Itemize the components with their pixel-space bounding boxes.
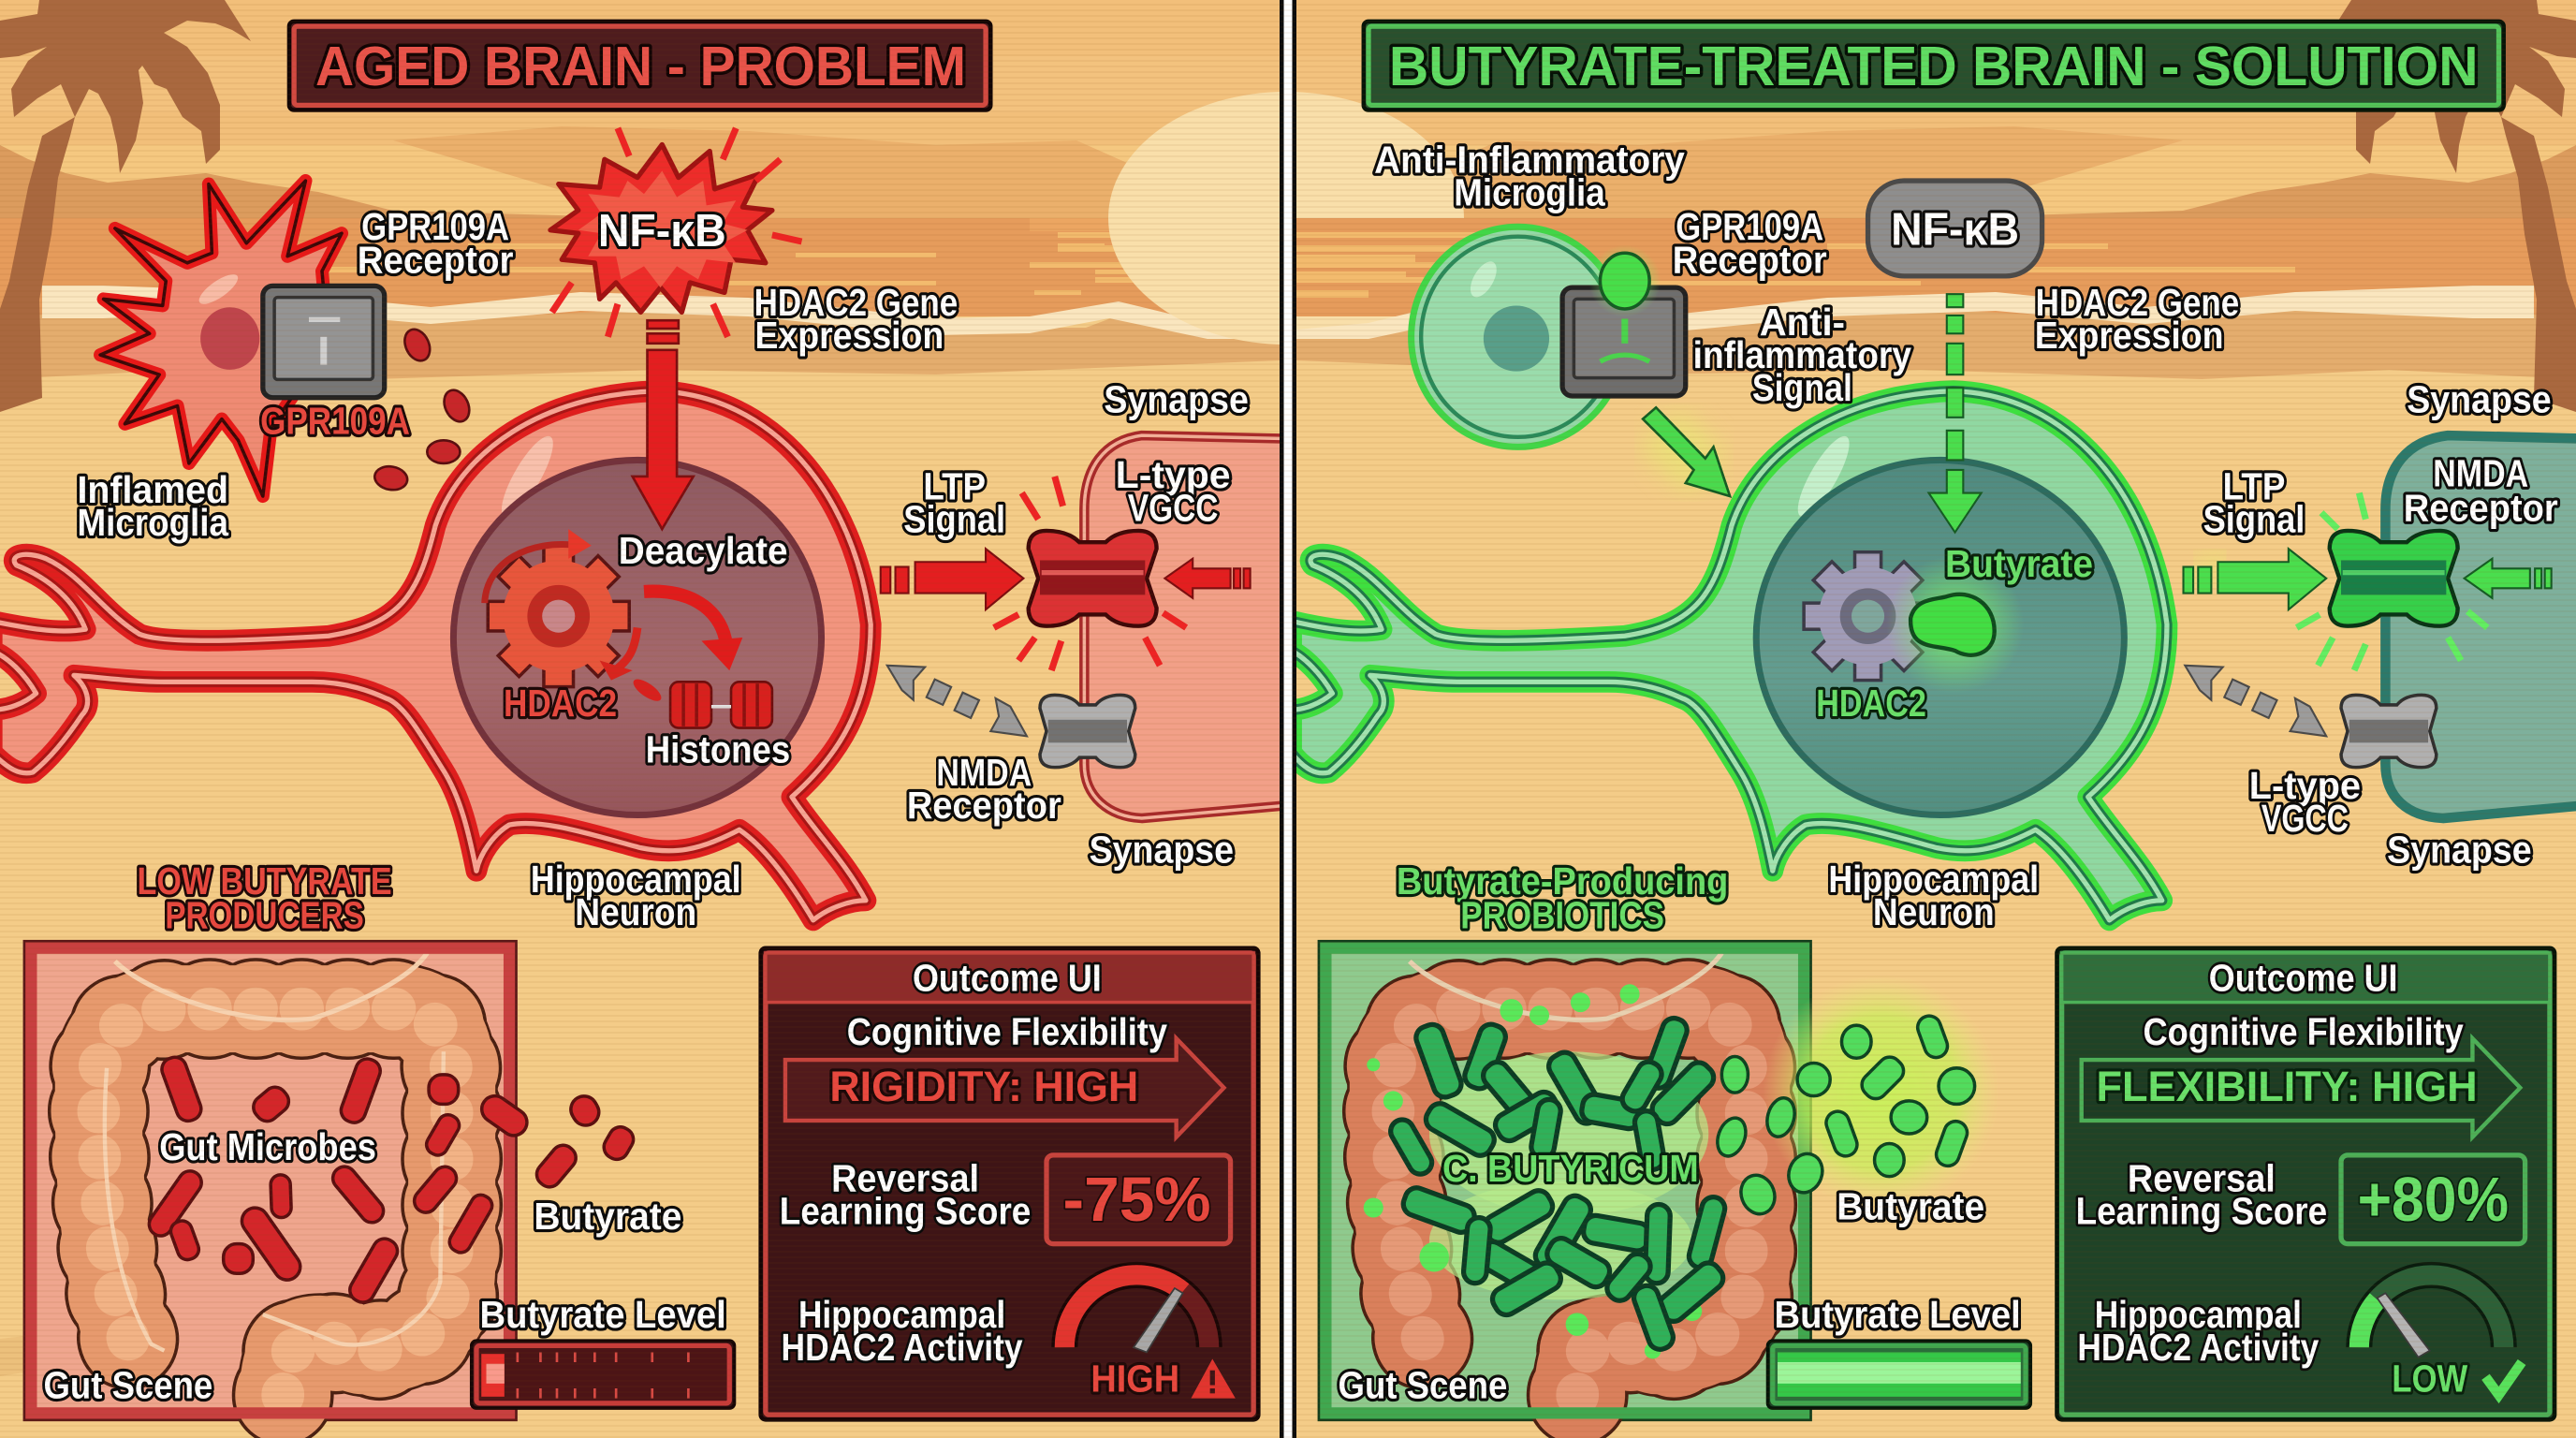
label: Anti-inflammatory Signal: inflammatory	[1693, 333, 1912, 376]
label: HIGH: HIGH	[1090, 1357, 1179, 1401]
panel: aged brain problem	[0, 22, 1290, 1419]
label: Low Butyrate Producers	[138, 859, 392, 937]
stat: -75%	[1046, 1155, 1231, 1244]
green probiotic glows	[1364, 984, 1714, 1358]
label: L-type VGCC	[1116, 453, 1231, 529]
label: L-type VGCC	[2249, 764, 2361, 840]
label: NMDA Receptor: Receptor	[2404, 486, 2558, 529]
panel: butyrate-treated brain solution	[1292, 22, 2576, 1419]
label: LTP Signal	[2203, 465, 2305, 541]
label: Hippocampal Neuron: Neuron	[575, 890, 696, 933]
label: Butyrate green: Butyrate	[1945, 542, 2093, 585]
title: butyrate-treated brain	[1364, 22, 2504, 110]
label: Butyrate: Butyrate	[1837, 1184, 1984, 1227]
label: LTP Signal: LTP	[2223, 465, 2285, 508]
arrow: signal to neuron	[1643, 407, 1730, 496]
label: LTP Signal	[903, 465, 1005, 541]
label: Gut Scene: Gut Scene	[1339, 1364, 1507, 1407]
label: Reversal Learning Score	[2076, 1156, 2327, 1233]
label: LTP Signal: LTP	[923, 465, 986, 508]
label: L-type VGCC: L-type	[2249, 764, 2361, 807]
label: LOW: LOW	[2392, 1357, 2468, 1401]
label: Synapse bottom: Synapse	[2387, 828, 2532, 871]
icon: butyrate blob	[1886, 555, 2024, 694]
label: Hippocampal Neuron	[1828, 858, 2039, 933]
title: aged brain	[289, 22, 990, 110]
label: L-type VGCC: L-type	[1116, 453, 1231, 496]
icon: NF-kB inactive pill: NF-κB	[1891, 205, 2019, 256]
nucleus	[453, 460, 822, 815]
label: Anti-inflammatory Signal	[1693, 301, 1912, 409]
label: NMDA Receptor	[907, 751, 1061, 827]
panel: outcome UI	[761, 948, 1258, 1419]
label: NMDA Receptor: NMDA	[936, 751, 1032, 794]
icon: GPR109A receptor activated	[1562, 245, 1686, 396]
title: butyrate-treated brain: BUTYRATE-TREATED BRAIN - SOLUTION	[1389, 35, 2479, 97]
arrow status: flexibility high: FLEXIBILITY: HIGH	[2097, 1063, 2478, 1110]
icon: inflamed microglia	[100, 181, 342, 496]
label: Histones: Histones	[646, 727, 790, 770]
label: Anti-Inflammatory Microglia: Microglia	[1454, 170, 1605, 213]
icon: HDAC2 gear active	[485, 529, 637, 687]
panel: gut scene treated	[1319, 942, 1810, 1419]
label: GPR109A red: GPR109A	[260, 399, 410, 442]
label: Butyrate Level: Butyrate Level	[479, 1293, 726, 1336]
label: Inflamed Microglia: Inflamed	[77, 468, 228, 511]
label: Butyrate-Producing Probiotics: Butyrate-Producing	[1397, 859, 1728, 902]
arrow: deacylation curve	[644, 592, 742, 670]
icon: HDAC2 gear inhibited	[1804, 552, 1932, 681]
label: Hippocampal HDAC2 Activity: Hippocampal	[798, 1293, 1005, 1336]
arrow status: rigidity high: RIGIDITY: HIGH	[829, 1063, 1138, 1110]
icon: active calcium channel	[994, 477, 1186, 670]
label: NMDA Receptor: NMDA	[2433, 452, 2528, 495]
label: Reversal Learning Score	[780, 1156, 1031, 1233]
label: Deacylate: Deacylate	[619, 529, 788, 572]
label: Anti-inflammatory Signal: Anti-	[1760, 301, 1845, 344]
label: Hippocampal HDAC2 Activity: HDAC2 Activity	[782, 1326, 1023, 1369]
colon treated	[1393, 953, 1747, 1413]
label: Anti-Inflammatory Microglia: Anti-Inflammatory	[1374, 138, 1685, 181]
heading: Outcome UI: Outcome UI	[913, 956, 1102, 999]
stat: -75%: -75%	[1063, 1166, 1211, 1235]
arrow: grey dotted double	[2185, 666, 2326, 736]
nucleus treated	[1756, 460, 2124, 815]
label: Hippocampal Neuron: Hippocampal	[531, 858, 741, 901]
label: Reversal Learning Score: Learning Score	[780, 1190, 1031, 1233]
label: HDAC2 Gene Expression	[754, 281, 958, 357]
arrow status: rigidity high	[785, 1038, 1224, 1137]
label: Butyrate-Producing Probiotics	[1397, 859, 1728, 937]
label: HDAC2 Gene Expression: HDAC2 Gene	[2036, 281, 2239, 324]
label: Cognitive Flexibility: Cognitive Flexibility	[847, 1010, 1167, 1053]
background: sunset beach right	[1108, 0, 2576, 1438]
arrow: LTP signal	[881, 549, 1023, 609]
label: Hippocampal HDAC2 Activity	[782, 1293, 1023, 1369]
label: HDAC2 green: HDAC2	[1816, 682, 1926, 725]
icon: NF-kB burst: NF-κB	[598, 206, 726, 257]
arrow: LTP signal green	[2184, 549, 2326, 609]
bar: butyrate level high	[1767, 1341, 2030, 1408]
label: HDAC2 red: HDAC2	[504, 682, 617, 725]
label: Hippocampal HDAC2 Activity	[2077, 1293, 2320, 1369]
label: Reversal Learning Score: Reversal	[2128, 1156, 2276, 1199]
cytokine particles	[373, 325, 474, 492]
label: LTP Signal: Signal	[2203, 498, 2305, 541]
label: GPR109A Receptor: GPR109A	[361, 205, 509, 248]
icon: NF-kB inactive pill	[1868, 181, 2042, 276]
label: Hippocampal HDAC2 Activity: Hippocampal	[2095, 1293, 2302, 1336]
neuron: hippocampal neuron treated	[1292, 391, 2167, 920]
arrow: dashed green	[1928, 294, 1982, 533]
synapse terminal	[1084, 435, 1290, 818]
butyrate glow	[1763, 975, 1999, 1211]
label: Anti-inflammatory Signal: Signal	[1752, 366, 1852, 409]
label: Reversal Learning Score: Reversal	[831, 1156, 979, 1199]
divider	[1280, 0, 1296, 1438]
label: Gut Microbes: Gut Microbes	[159, 1125, 376, 1168]
microbes red	[145, 1054, 637, 1307]
label: C. BUTYRICUM: C. BUTYRICUM	[1442, 1147, 1699, 1190]
label: Hippocampal Neuron: Hippocampal	[1828, 858, 2039, 901]
stat: +80%: +80%	[2358, 1166, 2509, 1235]
label: Inflamed Microglia	[77, 468, 228, 544]
icon: inactive grey channel	[2341, 695, 2437, 768]
colon	[98, 953, 452, 1413]
panel: outcome UI treated	[2056, 948, 2554, 1419]
bar: butyrate level low	[472, 1341, 735, 1408]
label: HDAC2 Gene Expression: Expression	[754, 314, 944, 357]
arrow: small right input green	[2465, 559, 2552, 598]
label: LTP Signal: Signal	[903, 498, 1005, 541]
label: L-type VGCC: VGCC	[1128, 486, 1218, 529]
gauge: HDAC2 activity high	[1064, 1275, 1209, 1352]
icon: histones	[630, 675, 772, 728]
label: Gut Scene: Gut Scene	[44, 1364, 212, 1407]
label: GPR109A Receptor	[358, 205, 514, 281]
label: Reversal Learning Score: Learning Score	[2076, 1190, 2327, 1233]
label: Butyrate: Butyrate	[534, 1195, 681, 1238]
probiotic rods	[1386, 1015, 1728, 1353]
synapse terminal treated	[2385, 435, 2576, 818]
label: NMDA Receptor: Receptor	[907, 784, 1061, 827]
arrow: NF-kB to nucleus	[633, 320, 694, 529]
label: HDAC2 Gene Expression	[2035, 281, 2239, 357]
icon: NF-kB burst	[550, 128, 801, 337]
icon: check mark	[2485, 1362, 2522, 1395]
arrow: small right input	[1164, 559, 1251, 598]
header	[2062, 953, 2550, 1003]
label: GPR109A Receptor: Receptor	[1673, 238, 1827, 281]
gauge: HDAC2 activity low	[2359, 1275, 2504, 1357]
label: Hippocampal Neuron	[531, 858, 741, 933]
label: Low Butyrate Producers: LOW BUTYRATE	[138, 859, 392, 902]
label: GPR109A Receptor	[1673, 205, 1827, 281]
palm tree right	[2325, 0, 2576, 412]
label: Synapse top: Synapse	[1104, 378, 1249, 421]
stat: +80%	[2341, 1155, 2525, 1244]
label: Low Butyrate Producers: PRODUCERS	[165, 894, 364, 937]
icon: anti-inflammatory microglia	[1412, 227, 1625, 447]
label: Synapse top: Synapse	[2407, 378, 2552, 421]
label: HDAC2 Gene Expression: Expression	[2035, 314, 2224, 357]
butyrate particles	[1712, 1013, 1975, 1219]
label: Butyrate Level: Butyrate Level	[1775, 1293, 2021, 1336]
icon: active channel green	[2202, 493, 2487, 670]
label: L-type VGCC: VGCC	[2261, 797, 2349, 840]
header	[766, 953, 1253, 1003]
neuron: hippocampal neuron	[0, 391, 871, 920]
label: NMDA Receptor	[2404, 452, 2558, 529]
heading: Outcome UI: Outcome UI	[2209, 956, 2398, 999]
label: Anti-Inflammatory Microglia	[1374, 138, 1685, 213]
label: Synapse bottom: Synapse	[1090, 828, 1234, 871]
title: aged brain: AGED BRAIN - PROBLEM	[315, 35, 966, 97]
label: GPR109A Receptor: Receptor	[358, 238, 514, 281]
label: GPR109A Receptor: GPR109A	[1676, 205, 1823, 248]
label: Hippocampal Neuron: Neuron	[1873, 890, 1995, 933]
panel: gut scene	[24, 942, 516, 1419]
label: Cognitive Flexibility: Cognitive Flexibility	[2144, 1010, 2464, 1053]
label: Hippocampal HDAC2 Activity: HDAC2 Activity	[2077, 1326, 2320, 1369]
label: Butyrate-Producing Probiotics: PROBIOTICS	[1460, 894, 1664, 937]
arrow: grey dotted double	[887, 666, 1027, 736]
arrow status: flexibility high	[2082, 1038, 2520, 1137]
palm tree left	[0, 0, 251, 412]
label: Inflamed Microglia: Microglia	[77, 501, 228, 544]
icon: GPR109A receptor box	[263, 286, 385, 398]
icon: inactive grey channel	[1040, 695, 1135, 768]
label: HDAC2 Gene Expression: HDAC2 Gene	[754, 281, 958, 324]
background: sunset beach left	[0, 0, 1456, 1438]
icon: warning triangle	[1191, 1358, 1236, 1399]
